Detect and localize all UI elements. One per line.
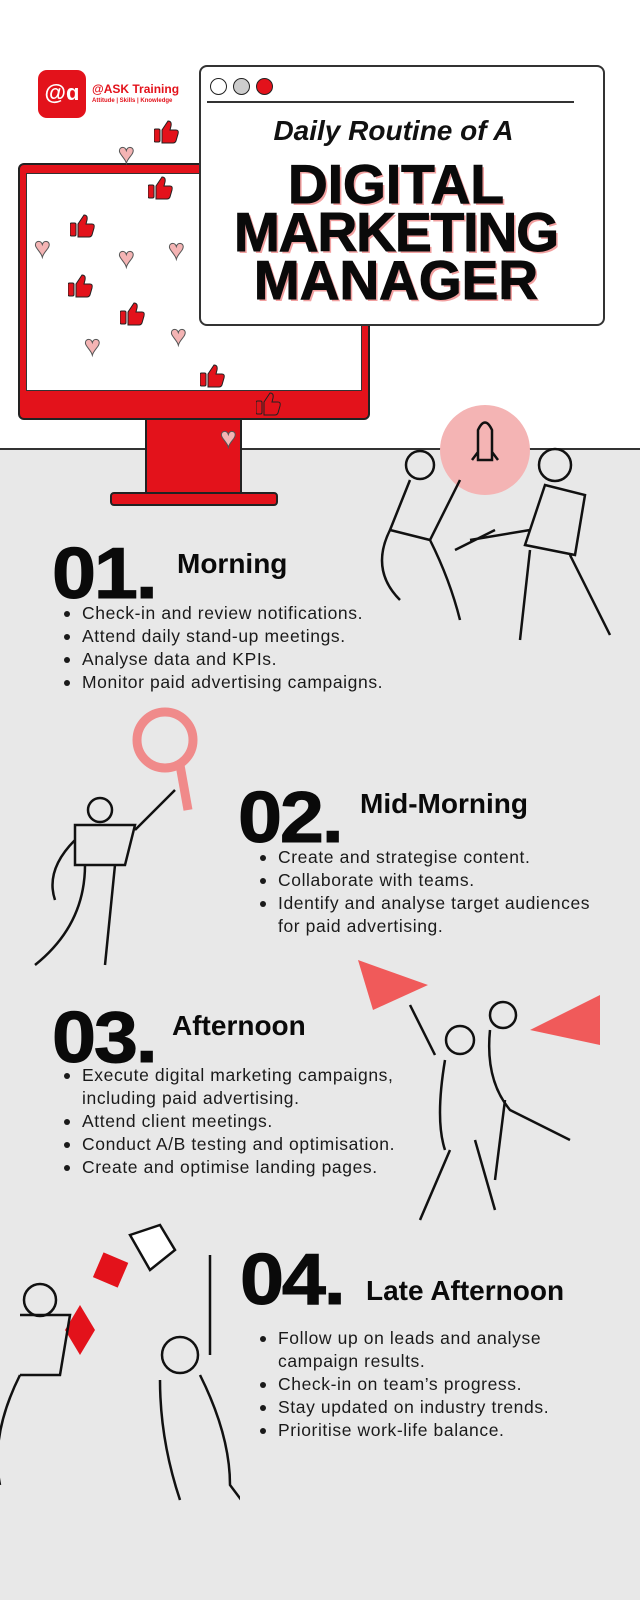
monitor xyxy=(18,163,370,492)
logo: Attitude | Skills | Knowledge xyxy=(92,98,172,104)
logo: @ɑ xyxy=(45,80,79,105)
illustration: puzzle people xyxy=(0,1224,240,1500)
hearts and likes: ♥ xyxy=(220,422,237,453)
hearts and likes: ♥ xyxy=(84,330,101,361)
bullets: Monitor paid advertising campaigns. xyxy=(82,672,383,692)
bullets: Check-in and review notifications. xyxy=(82,603,363,623)
window dots xyxy=(210,78,273,95)
illustration: two people with megaphones xyxy=(358,960,600,1220)
hearts and likes: ♥ xyxy=(118,138,135,169)
heading Morning: Morning xyxy=(177,548,287,579)
bullets: Collaborate with teams. xyxy=(278,870,475,890)
heading Mid-Morning: Mid-Morning xyxy=(360,788,528,819)
number 02: 02. xyxy=(238,778,342,858)
hearts and likes: ♥ xyxy=(170,320,187,351)
title window: MARKETING xyxy=(234,201,558,263)
title window: MANAGER xyxy=(254,249,538,311)
monitor base xyxy=(110,492,278,506)
illustration: two people with rocket xyxy=(380,405,612,640)
hearts and likes: ♥ xyxy=(34,232,51,263)
section 02 xyxy=(238,778,590,936)
number 03: 03. xyxy=(52,998,156,1078)
bullets: Attend daily stand-up meetings. xyxy=(82,626,346,646)
bullets: Execute digital marketing campaigns, xyxy=(82,1065,393,1085)
bullets: Stay updated on industry trends. xyxy=(278,1397,549,1417)
bullets: Create and strategise content. xyxy=(278,847,530,867)
bullets: Follow up on leads and analyse xyxy=(278,1328,541,1348)
bullets: Prioritise work-life balance. xyxy=(278,1420,505,1440)
hearts and likes xyxy=(34,120,281,453)
heading Afternoon: Afternoon xyxy=(172,1010,306,1041)
main title: DIGITAL xyxy=(288,153,504,215)
number 04: 04. xyxy=(240,1240,344,1320)
section 04 xyxy=(240,1240,564,1440)
grey background xyxy=(0,448,640,1600)
bullets: including paid advertising. xyxy=(82,1088,300,1108)
section 01 xyxy=(52,534,383,692)
bullets xyxy=(260,847,590,936)
logo: @ASK Training xyxy=(92,82,179,96)
bullets: campaign results. xyxy=(278,1351,425,1371)
bullets xyxy=(64,603,383,692)
bullets: Create and optimise landing pages. xyxy=(82,1157,378,1177)
title window xyxy=(199,65,605,326)
bullets: Conduct A/B testing and optimisation. xyxy=(82,1134,395,1154)
bullets: Check-in on team’s progress. xyxy=(278,1374,522,1394)
bullets: Identify and analyse target audiences xyxy=(278,893,590,913)
hearts and likes: ♥ xyxy=(118,242,135,273)
heading Late Afternoon: Late Afternoon xyxy=(366,1275,564,1306)
bullets: for paid advertising. xyxy=(278,916,443,936)
number 01: 01. xyxy=(52,534,156,614)
hearts and likes: ♥ xyxy=(168,234,185,265)
bullets xyxy=(64,1065,395,1177)
illustration: person with magnifier xyxy=(34,708,198,966)
bullets xyxy=(260,1328,549,1440)
section 03 xyxy=(52,998,395,1177)
subtitle: Daily Routine of A xyxy=(273,115,514,146)
logo xyxy=(38,70,179,118)
bullets: Analyse data and KPIs. xyxy=(82,649,277,669)
bullets: Attend client meetings. xyxy=(82,1111,273,1131)
